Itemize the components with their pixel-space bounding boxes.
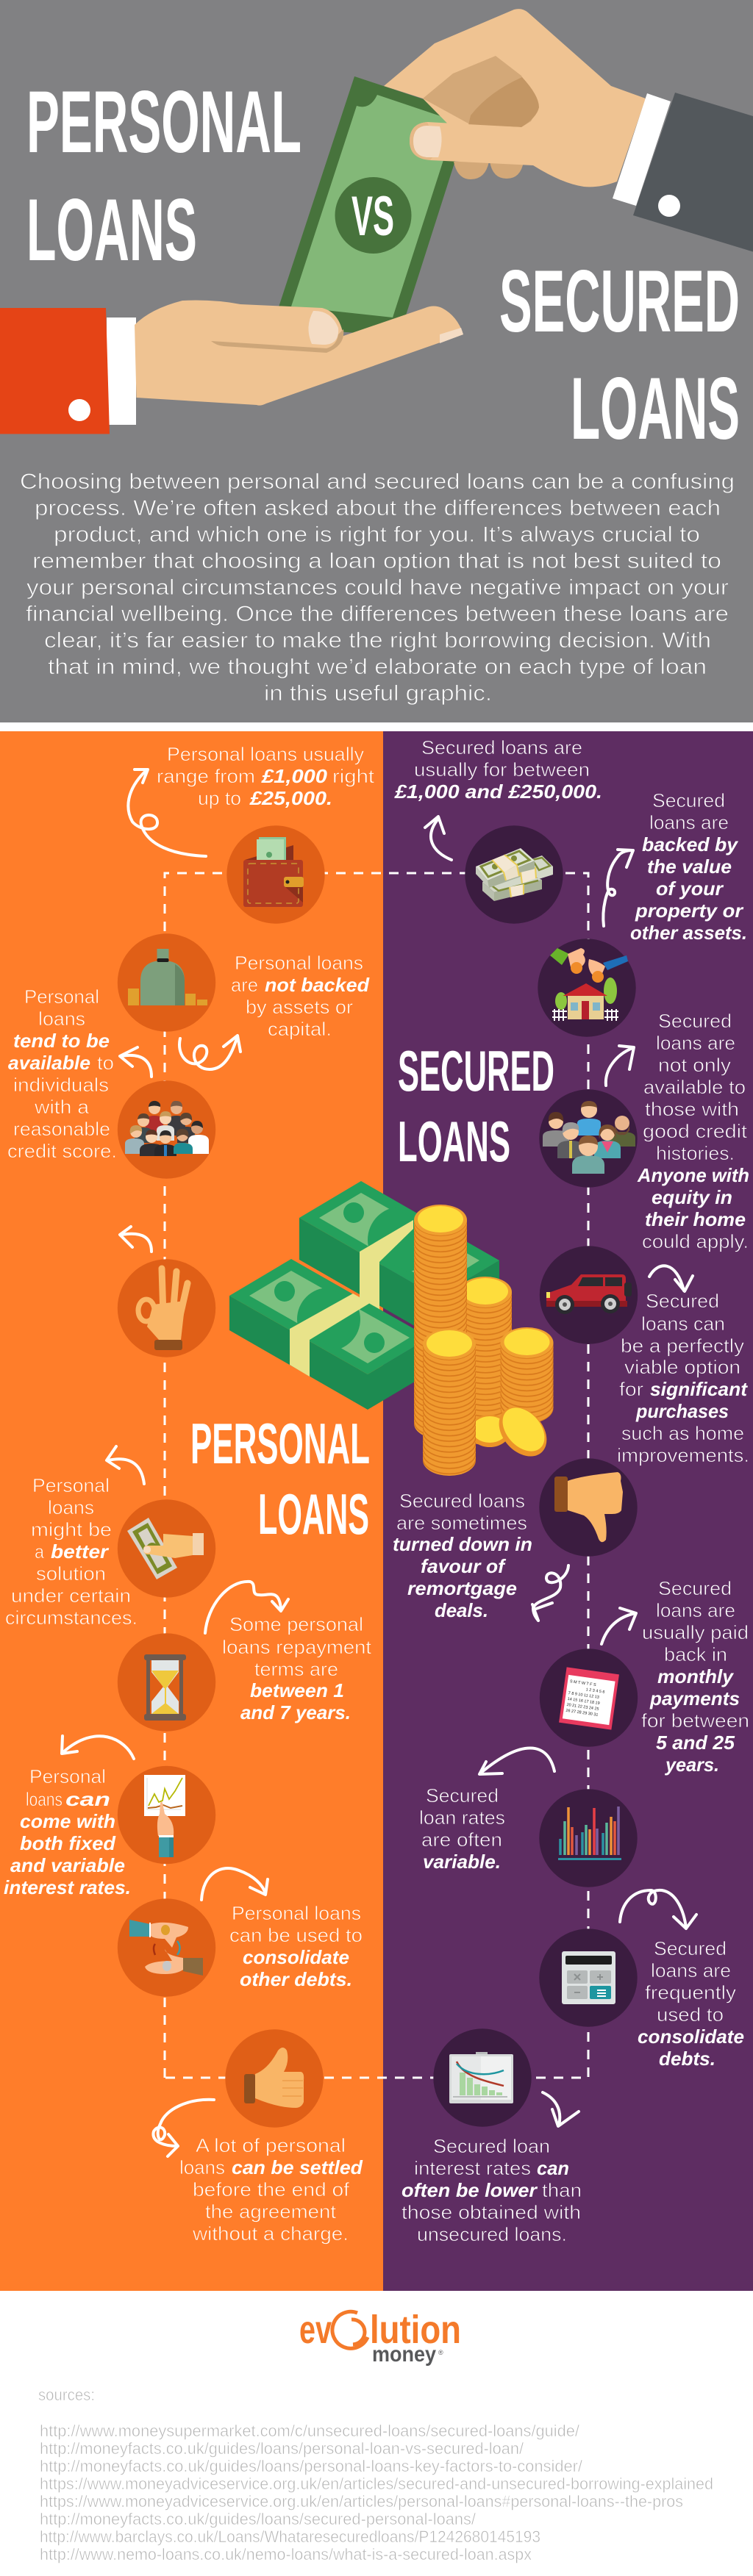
logo: evolution money: money	[372, 2342, 436, 2367]
text: not only good credit: Secured	[658, 1010, 732, 1032]
intro paragraph: that in mind, we thought we’d elaborate on each type of loan	[48, 655, 707, 679]
intro paragraph: product, and which one is right for you. It’s always crucial to	[54, 523, 700, 547]
text: better solution: loans	[48, 1496, 94, 1518]
icon: calendar	[540, 1648, 638, 1747]
text: personal loans range: right	[332, 765, 375, 787]
logo: evolution money: ev	[299, 2308, 332, 2352]
text: better solution	[5, 1474, 138, 1629]
arrow: from banknote hand	[107, 1446, 144, 1484]
text: consolidate debts	[638, 1937, 744, 2070]
arrow: to backed by value text	[603, 850, 633, 926]
text: repayment terms: Some personal	[229, 1613, 363, 1635]
text: backed by property: property or	[635, 900, 744, 922]
arrow: thumbs down to remortgage text	[532, 1565, 568, 1621]
heading: secured loans: LOANS	[398, 1109, 510, 1174]
text: better solution: a	[35, 1540, 44, 1563]
text: not only good credit: good credit	[643, 1120, 748, 1142]
arrow: car to purchases text	[649, 1266, 693, 1291]
text: not only good credit: loans are	[656, 1032, 735, 1054]
text: better solution: Personal	[32, 1474, 110, 1496]
title: secured loans	[499, 252, 740, 458]
text: monthly payments: 5 and 25	[656, 1732, 735, 1754]
text: consolidate debts: used to	[657, 2003, 724, 2026]
sources list: http://moneyfacts.co.uk/guides/loans/secured-personal-loans/	[40, 2510, 477, 2528]
central illustration: cash stacks and coins	[229, 1181, 556, 1476]
text: credit score availability: available	[8, 1052, 90, 1074]
text: monthly payments: years.	[664, 1754, 719, 1776]
arrow: to variable rates text	[479, 1748, 554, 1774]
text: remortgage deals: turned down in	[393, 1533, 532, 1555]
text: secured loans range	[394, 736, 602, 803]
text: fixed and variable rates: and variable	[10, 1854, 125, 1876]
text: not only good credit: their home	[645, 1208, 746, 1230]
text: lower interest rates	[402, 2135, 582, 2245]
text: credit score availability: reasonable	[13, 1118, 110, 1140]
text: variable rates	[419, 1784, 505, 1873]
text: remortgage deals: Secured loans	[399, 1490, 525, 1512]
title: personal loans	[26, 73, 301, 279]
icon: bundles of cash	[465, 825, 563, 924]
arrow: thumbs up to settled text	[153, 2100, 214, 2156]
text: better solution: under certain	[11, 1585, 131, 1607]
text: variable rates: are often	[421, 1829, 502, 1851]
text: credit score availability	[7, 986, 117, 1162]
text: significant purchases: loans can	[641, 1313, 725, 1335]
text: significant purchases: for	[619, 1378, 643, 1400]
text: consolidate debts: consolidate	[638, 2026, 744, 2048]
text: monthly payments: loans are	[656, 1599, 735, 1621]
panel: personal loans background	[0, 731, 383, 2291]
text: fixed and variable rates: Personal	[29, 1765, 106, 1787]
banknote with VS: VS	[351, 185, 394, 248]
icon: cash stacks	[229, 1181, 499, 1410]
text: settled early: A lot of personal	[196, 2134, 346, 2156]
arrow: cash to secured range text	[425, 817, 452, 860]
sources list: http://www.nemo-loans.co.uk/nemo-loans/what-is-a-secured-loan.aspx	[40, 2545, 532, 2564]
intro paragraph: your personal circumstances could have negative impact on your	[26, 575, 729, 600]
icon: hourglass	[118, 1633, 215, 1732]
title: personal loans: PERSONAL	[26, 73, 301, 171]
arrow: to consolidate other debts text	[201, 1868, 268, 1900]
text: personal loans range: Personal loans usually	[167, 743, 364, 765]
icon: calendar: S M T W T F S	[570, 1679, 596, 1687]
text: repayment terms: loans repayment	[222, 1636, 372, 1658]
heading: secured loans: SECURED	[398, 1038, 554, 1103]
text: better solution: better	[51, 1540, 110, 1563]
text: personal loans range: £1,000	[261, 765, 328, 787]
text: not backed by assets: Personal loans	[235, 952, 363, 974]
icon: calendar: 14 15 16 17 18 19	[567, 1697, 600, 1706]
text: credit score availability: credit score.	[7, 1140, 117, 1162]
text: consolidate other debts: consolidate	[243, 1946, 349, 1968]
panel: secured loans background	[383, 731, 753, 2291]
text: consolidate other debts: can be used to	[229, 1924, 363, 1946]
arrow: to credit score text	[120, 1047, 151, 1077]
icon: report with declining graph	[433, 2028, 532, 2127]
text: credit score availability: with a	[34, 1096, 90, 1118]
text: not only good credit	[637, 1010, 749, 1252]
text: settled early: without a charge.	[192, 2222, 349, 2245]
icon: hands exchanging coins	[118, 1898, 215, 1997]
text: remortgage deals: are sometimes	[396, 1512, 527, 1534]
text: variable rates: Secured	[426, 1784, 499, 1807]
text: monthly payments	[641, 1577, 749, 1776]
dashed connector loop	[165, 873, 588, 2078]
text: significant purchases: purchases	[635, 1400, 729, 1422]
icon: house and hands	[538, 939, 636, 1037]
text: consolidate debts: loans are	[651, 1959, 731, 1981]
text: remortgage deals: remortgage	[407, 1577, 517, 1599]
text: repayment terms: and 7 years.	[240, 1701, 351, 1723]
intro paragraph: process. We’re often asked about the differences between each	[35, 496, 721, 520]
text: monthly payments: for between	[641, 1709, 749, 1732]
text: significant purchases: improvements.	[617, 1444, 749, 1466]
text: not only good credit: those with	[645, 1098, 739, 1120]
text: credit score availability: Personal	[24, 986, 99, 1008]
arrow: to not backed text	[179, 1036, 240, 1069]
icon: thumbs up	[225, 2029, 324, 2128]
intro paragraph: in this useful graphic.	[264, 681, 492, 706]
text: monthly payments: Secured	[658, 1577, 732, 1599]
text: settled early: the agreement	[205, 2200, 337, 2222]
text: lower interest rates: than	[542, 2179, 582, 2201]
icon: upper hand giving note	[384, 9, 753, 251]
text: better solution: solution	[36, 1563, 106, 1585]
text: consolidate other debts: other debts.	[240, 1968, 352, 1990]
text: not only good credit: available to	[643, 1076, 746, 1098]
intro paragraph: Choosing between personal and secured loans can be a confusing	[20, 470, 735, 494]
logo: evolution money: ®	[438, 2349, 443, 2356]
text: not only good credit: equity in	[652, 1186, 732, 1208]
sources list: http://moneyfacts.co.uk/guides/loans/personal-loans-key-factors-to-consider/	[40, 2457, 583, 2475]
text: settled early	[179, 2134, 363, 2245]
text: backed by property	[630, 789, 747, 944]
icon: bar chart	[539, 1789, 638, 1887]
header panel	[0, 0, 753, 722]
text: consolidate other debts	[229, 1902, 363, 1990]
text: not backed by assets	[231, 952, 370, 1040]
text: personal loans range: up to	[198, 787, 241, 809]
arrow: report to lower rates text	[543, 2092, 579, 2126]
text: fixed and variable rates: come with	[20, 1810, 115, 1832]
text: backed by property: of your	[656, 878, 724, 900]
text: consolidate debts: frequently	[645, 1981, 736, 2003]
text: fixed and variable rates	[4, 1765, 131, 1898]
text: backed by property: loans are	[649, 811, 729, 833]
sources list: https://www.moneyadviceservice.org.uk/en/articles/secured-and-unsecured-borrowing-explained	[40, 2475, 713, 2493]
text: fixed and variable rates: loans	[26, 1788, 63, 1810]
icon: calculator	[539, 1929, 638, 2027]
text: not only good credit: not only	[658, 1054, 731, 1076]
text: personal loans range	[157, 743, 375, 809]
sources list	[38, 2386, 713, 2564]
text: lower interest rates: those obtained with	[402, 2201, 581, 2223]
text: repayment terms: between 1	[250, 1679, 344, 1701]
text: settled early: can be settled	[232, 2156, 363, 2178]
text: significant purchases: be a perfectly	[621, 1335, 744, 1357]
intro paragraph	[20, 470, 735, 706]
text: remortgage deals	[393, 1490, 532, 1621]
text: significant purchases: such as home	[621, 1422, 744, 1444]
icon: calendar: 7 8 9 10 11 12 13	[568, 1691, 599, 1700]
sources list: http://www.moneysupermarket.com/c/unsecured-loans/secured-loans/guide/	[40, 2422, 580, 2440]
text: backed by property: the value	[647, 855, 732, 878]
text: secured loans range: Secured loans are	[421, 736, 582, 758]
text: monthly payments: back in	[664, 1643, 727, 1665]
icon: calendar: 26 27 28 29 30 31	[565, 1709, 599, 1718]
text: settled early: before the end of	[193, 2178, 350, 2200]
text: not only good credit: could apply.	[642, 1230, 749, 1252]
sources list: http://www.barclays.co.uk/Loans/Whataresecuredloans/P1242680145193	[40, 2527, 540, 2546]
text: consolidate debts: debts.	[659, 2048, 715, 2070]
icon: thumbs down	[539, 1458, 638, 1557]
text: backed by property: other assets.	[630, 922, 747, 944]
heading: personal loans	[190, 1411, 370, 1546]
text: fixed and variable rates: both fixed	[20, 1832, 116, 1854]
text: credit score availability: to	[97, 1052, 114, 1074]
text: monthly payments: usually paid	[642, 1621, 749, 1643]
text: credit score availability: individuals	[13, 1074, 109, 1096]
arrow: to not only available text	[606, 1046, 634, 1086]
text: significant purchases	[617, 1290, 749, 1466]
sources list: https://www.moneyadviceservice.org.uk/en/articles/personal-loans#personal-loans--the-pros	[40, 2492, 683, 2511]
intro paragraph: clear, it’s far easier to make the right borrowing decision. With	[44, 628, 711, 653]
text: lower interest rates: Secured loan	[433, 2135, 550, 2157]
sources list: http://moneyfacts.co.uk/guides/loans/personal-loan-vs-secured-loan/	[40, 2439, 524, 2458]
icon: group of people (personal)	[118, 1080, 215, 1179]
text: not backed by assets: by assets or	[246, 996, 353, 1018]
text: lower interest rates: can	[537, 2157, 569, 2179]
text: consolidate debts: Secured	[654, 1937, 727, 1959]
text: remortgage deals: deals.	[435, 1599, 488, 1621]
heading: personal loans: PERSONAL	[190, 1411, 370, 1476]
text: credit score availability: tend to be	[13, 1030, 110, 1052]
icon: lower hand receiving note	[0, 301, 463, 434]
text: lower interest rates: interest rates	[414, 2157, 531, 2179]
arrow: to consolidate debts text	[620, 1890, 696, 1929]
icon: hand with banknote	[118, 1499, 215, 1598]
text: significant purchases: viable option	[624, 1356, 740, 1378]
text: not backed by assets: are	[231, 974, 258, 996]
text: credit score availability: loans	[38, 1008, 85, 1030]
arrow: to repayment terms text	[205, 1582, 288, 1633]
icon: coin stacks	[414, 1205, 556, 1476]
icon: red car	[540, 1246, 638, 1344]
text: personal loans range: range from	[157, 765, 255, 787]
intro paragraph: financial wellbeing. Once the differences between these loans are	[26, 602, 729, 626]
arrow: to fixed and variable text	[62, 1736, 134, 1759]
text: backed by property: Secured	[652, 789, 725, 811]
text: variable rates: variable.	[423, 1851, 501, 1873]
text: better solution: circumstances.	[5, 1607, 138, 1629]
text: monthly payments: payments	[649, 1687, 740, 1709]
text: not only good credit: histories.	[656, 1142, 735, 1164]
text: not backed by assets: capital.	[268, 1018, 332, 1040]
arrow: to monthly payments text	[602, 1608, 636, 1644]
icon: OK hand	[118, 1259, 215, 1357]
logo: evolution money	[299, 2308, 461, 2367]
icon: wallet	[226, 825, 325, 924]
text: fixed and variable rates: interest rates.	[4, 1876, 131, 1898]
text: secured loans range: usually for between	[414, 758, 590, 781]
text: backed by property: backed by	[642, 833, 739, 855]
icon: chart with pointing hand	[118, 1766, 215, 1864]
text: personal loans range: £25,000.	[249, 787, 332, 809]
logo: evolution money: lution	[370, 2308, 461, 2352]
intro paragraph: remember that choosing a loan option that is not best suited to	[32, 549, 721, 573]
icon: calendar: 20 21 22 23 24 25	[566, 1703, 599, 1712]
banknote with VS	[272, 76, 470, 336]
icon: calendar: 1 2 3 4 5 6	[585, 1687, 605, 1695]
text: lower interest rates: unsecured loans.	[417, 2223, 567, 2245]
text: consolidate other debts: Personal loans	[232, 1902, 361, 1924]
text: not only good credit: Anyone with	[637, 1164, 749, 1186]
sources list: sources:	[38, 2386, 95, 2404]
heading: secured loans	[398, 1038, 554, 1174]
title: personal loans: LOANS	[26, 181, 197, 279]
arrow: wallet to range text	[128, 769, 206, 856]
text: secured loans range: £1,000 and £250,000.	[394, 781, 602, 803]
text: remortgage deals: favour of	[421, 1555, 506, 1577]
text: fixed and variable rates: can	[65, 1788, 110, 1810]
icon: group of people (secured)	[539, 1089, 638, 1188]
text: repayment terms	[222, 1613, 372, 1723]
text: settled early: loans	[179, 2156, 225, 2178]
text: better solution: might be	[31, 1518, 112, 1540]
icon: money bag	[118, 933, 215, 1032]
text: monthly payments: monthly	[657, 1665, 735, 1687]
text: significant purchases: significant	[650, 1378, 748, 1400]
text: variable rates: loan rates	[419, 1807, 505, 1829]
arrow: from OK hand	[120, 1227, 151, 1252]
heading: personal loans: LOANS	[258, 1482, 369, 1546]
text: repayment terms: terms are	[254, 1658, 338, 1680]
text: significant purchases: Secured	[646, 1290, 719, 1312]
text: not backed by assets: not backed	[265, 974, 370, 996]
text: lower interest rates: often be lower	[402, 2179, 538, 2201]
